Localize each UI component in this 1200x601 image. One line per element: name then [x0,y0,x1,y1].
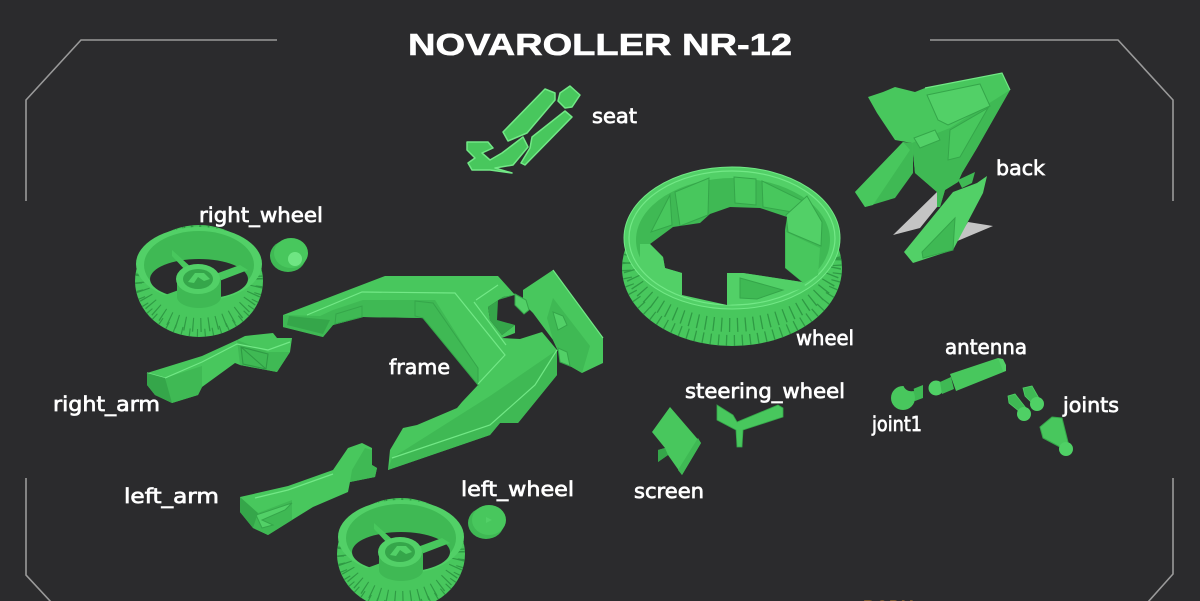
back: main body [868,73,1010,207]
part: steering wheel [717,405,783,447]
label: left_arm: left_arm [124,484,219,508]
label: antenna: antenna [945,335,1027,359]
part: wheel [622,167,842,346]
part: right arm [147,333,292,403]
wheel: rim [624,167,840,309]
wheel: inner wall [636,178,830,302]
label: wheel: wheel [796,326,854,350]
wheel: lower inner brackets [640,244,682,296]
part: joint1 [891,382,923,410]
label: left_wheel: left_wheel [461,477,574,501]
wheel: tyre [622,190,842,346]
part: frame [283,276,557,470]
corner frame: top left [26,40,277,201]
label: right_wheel: right_wheel [199,203,323,227]
label: back: back [996,156,1045,180]
part: screen [652,407,701,475]
title: NOVAROLLER NR-12 [408,27,792,62]
back: left wing [855,142,913,207]
label: frame: frame [389,355,450,379]
wheel: interior panels [651,177,803,232]
part: left arm [240,443,377,535]
label: joint1: joint1 [871,412,922,436]
label: seat: seat [592,104,637,128]
corner frame: bottom right [1148,478,1173,601]
part: right wheel [135,225,263,337]
frame: inner side walls [283,300,478,385]
back: grey supports [893,192,993,242]
label: joints: joints [1062,393,1119,417]
part: seat [467,86,580,173]
frame: ridge lines [307,285,506,384]
back: lower wing [904,176,987,263]
part: back [855,73,1010,263]
part: left wheel [337,498,465,601]
part: right wheel cap [270,238,308,272]
part: antenna [928,358,1006,396]
part: left wheel cap [468,505,506,539]
wheel: hole [650,207,802,305]
label: screen: screen [634,479,704,503]
label: right_arm: right_arm [53,392,160,416]
corner frame: top right [930,40,1173,201]
frame: main body [283,276,557,470]
part: joints [1008,386,1073,456]
wheel: tread pattern [622,250,842,346]
part: frame rear bumper [515,270,603,373]
corner frame: bottom left [26,478,51,601]
label: steering_wheel: steering_wheel [685,379,845,403]
